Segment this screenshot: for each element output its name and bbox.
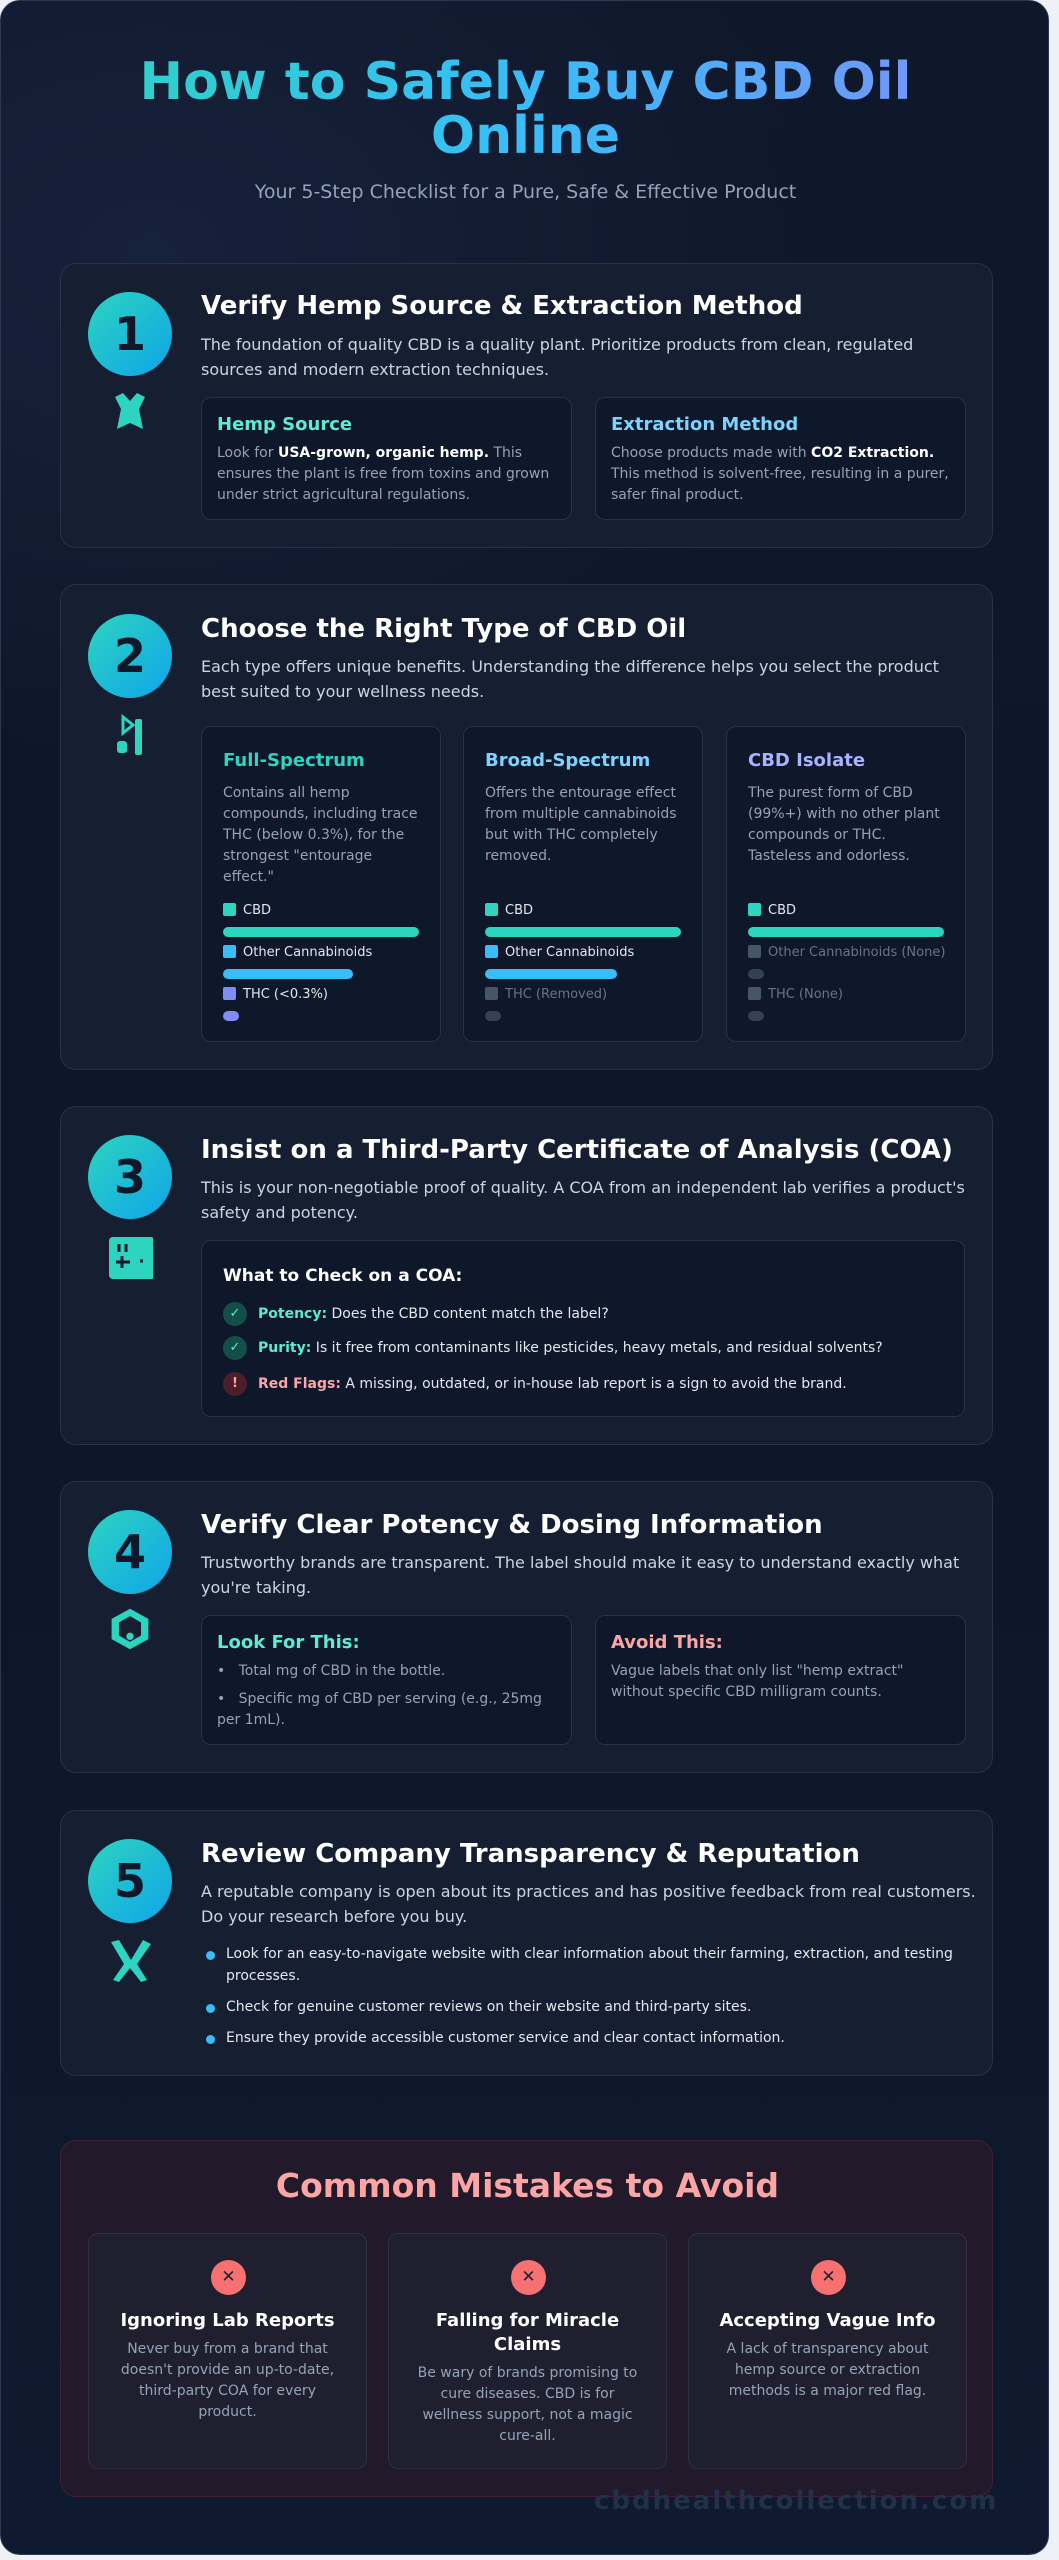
sub-card: isolate: CBD (768, 903, 796, 918)
sub-card: hemp source: Look for USA-grown, organic hemp. This ensures the plant is free from toxins and grown under strict agricultural regulations. (217, 445, 549, 503)
heading: Common Mistakes to Avoid (276, 2166, 779, 2205)
icon: dropper (117, 714, 142, 755)
checklist box: ✓ (230, 1340, 240, 1355)
mistake card 2 (388, 2233, 667, 2469)
icon: certificate (109, 1237, 153, 1279)
step number 2 (88, 614, 172, 698)
bullet list: Look for an easy-to-navigate website with clear information about their farming, extraction, and testing processes. (226, 1946, 953, 1984)
sub-card: full spectrum: CBD (243, 903, 271, 918)
heading: Review Company Transparency & Reputation (201, 1839, 860, 1869)
sub-card: full spectrum: Contains all hemp compounds, including trace THC (below 0.3%), for the strongest "entourage effect." (223, 785, 418, 885)
panel: step 5 (60, 1810, 993, 2076)
text block: Trustworthy brands are transparent. The label should make it easy to understand exactly what you're taking. (201, 1553, 959, 1597)
subtitle: Your 5-Step Checklist for a Pure, Safe & Effective Product (255, 181, 796, 203)
sub-card: isolate: THC (None) (768, 987, 843, 1002)
panel: step 2 (60, 584, 993, 1070)
checklist box (201, 1240, 965, 1417)
sub-card: broad spectrum: THC (Removed) (505, 987, 607, 1002)
step number 4: 4 (114, 1525, 146, 1579)
panel: step 3 (60, 1106, 993, 1445)
step number 3: 3 (114, 1150, 146, 1204)
checklist box: What to Check on a COA: (223, 1266, 462, 1286)
sub-card: extraction method (595, 397, 966, 520)
text block: This is your non-negotiable proof of quality. A COA from an independent lab verifies a product's safety and potency. (201, 1178, 965, 1222)
sub-card: full spectrum (201, 726, 441, 1042)
title: Online (431, 106, 620, 166)
sub-card: full spectrum: THC (<0.3%) (243, 987, 328, 1002)
checklist box: ✓ (230, 1306, 240, 1321)
sub-card: full spectrum: Other Cannabinoids (243, 945, 372, 960)
sub-card: isolate: The purest form of CBD (99%+) with no other plant compounds or THC. Tasteless and odorless. (748, 785, 940, 864)
sub-card: avoid: Avoid This: (611, 1632, 723, 1653)
icon: handshake (111, 1940, 151, 1982)
sub-card: extraction method: Extraction Method (611, 414, 798, 435)
heading: Choose the Right Type of CBD Oil (201, 614, 686, 644)
mistake card 3: Accepting Vague Info (719, 2310, 936, 2331)
heading: Insist on a Third-Party Certificate of Analysis (COA) (201, 1135, 953, 1165)
sub-card: hemp source: Hemp Source (217, 414, 352, 435)
sub-card: broad spectrum: Broad-Spectrum (485, 750, 650, 771)
mistake card 1: Never buy from a brand that doesn't provide an up-to-date, third-party COA for every product. (121, 2341, 334, 2420)
sub-card: extraction method: Choose products made with CO2 Extraction. This method is solvent-free, resulting in a purer, safer final product. (611, 445, 949, 503)
sub-card: isolate: Other Cannabinoids (None) (768, 945, 945, 960)
title (140, 52, 911, 166)
mistake card 1 (88, 2233, 367, 2469)
text block: The foundation of quality CBD is a quality plant. Prioritize products from clean, regulated sources and modern extraction techniques. (201, 335, 913, 379)
sub-card: full spectrum: Full-Spectrum (223, 750, 365, 771)
sub-card: look for: • Total mg of CBD in the bottle. (217, 1663, 445, 1679)
title: How to Safely Buy CBD Oil (140, 52, 911, 112)
step number 1: 1 (114, 307, 146, 361)
text block: A reputable company is open about its practices and has positive feedback from real customers. Do your research before you buy. (201, 1882, 976, 1926)
sub-card: broad spectrum: Offers the entourage effect from multiple cannabinoids but with THC completely removed. (485, 785, 677, 864)
step number 5 (88, 1839, 172, 1923)
sub-card: avoid (595, 1615, 966, 1745)
panel: step 4 (60, 1481, 993, 1773)
panel: step 1 (60, 263, 993, 548)
sub-card: look for: Look For This: (217, 1632, 360, 1653)
icon: label hexagon (112, 1608, 148, 1650)
bullet list: Ensure they provide accessible customer service and clear contact information. (226, 2030, 785, 2046)
heading: Verify Hemp Source & Extraction Method (201, 291, 803, 321)
text block: Each type offers unique benefits. Understanding the difference helps you select the product best suited to your wellness needs. (201, 657, 939, 701)
mistake card 1: ✕ (221, 2267, 236, 2287)
sub-card: hemp source (201, 397, 572, 520)
step number 3 (88, 1135, 172, 1219)
panel: common mistakes (60, 2140, 993, 2497)
sub-card: isolate: CBD Isolate (748, 750, 865, 771)
watermark: cbdhealthcollection.com (594, 2486, 998, 2516)
checklist box: Potency: Does the CBD content match the label? (258, 1306, 609, 1322)
sub-card: broad spectrum (463, 726, 703, 1042)
checklist box: Red Flags: A missing, outdated, or in-house lab report is a sign to avoid the brand. (258, 1376, 847, 1392)
sub-card: broad spectrum: CBD (505, 903, 533, 918)
mistake card 1: Ignoring Lab Reports (120, 2310, 335, 2331)
sub-card: isolate (726, 726, 966, 1042)
step number 5: 5 (114, 1854, 146, 1908)
checklist box: Purity: Is it free from contaminants like pesticides, heavy metals, and residual solvents? (258, 1340, 883, 1356)
sub-card: broad spectrum: Other Cannabinoids (505, 945, 634, 960)
mistake card 3: A lack of transparency about hemp source or extraction methods is a major red flag. (727, 2341, 928, 2399)
step number 4 (88, 1510, 172, 1594)
checklist box: ! (232, 1376, 238, 1391)
mistake card 2: Falling for Miracle Claims (436, 2310, 619, 2355)
bullet list (206, 1946, 953, 2046)
icon: award (115, 393, 145, 429)
step number 2: 2 (114, 629, 146, 683)
sub-card: look for (201, 1615, 572, 1745)
bullet list: Check for genuine customer reviews on their website and third-party sites. (226, 1999, 751, 2015)
mistake card 3 (688, 2233, 967, 2469)
mistake card 2: Be wary of brands promising to cure diseases. CBD is for wellness support, not a magic cure-all. (418, 2365, 637, 2444)
heading: Verify Clear Potency & Dosing Information (201, 1510, 823, 1540)
mistake card 3: ✕ (821, 2267, 836, 2287)
mistake card 2: ✕ (521, 2267, 536, 2287)
step number 1 (88, 292, 172, 376)
sub-card: look for: • Specific mg of CBD per serving (e.g., 25mg per 1mL). (217, 1691, 542, 1728)
sub-card: avoid: Vague labels that only list "hemp extract" without specific CBD milligram counts. (611, 1663, 903, 1700)
